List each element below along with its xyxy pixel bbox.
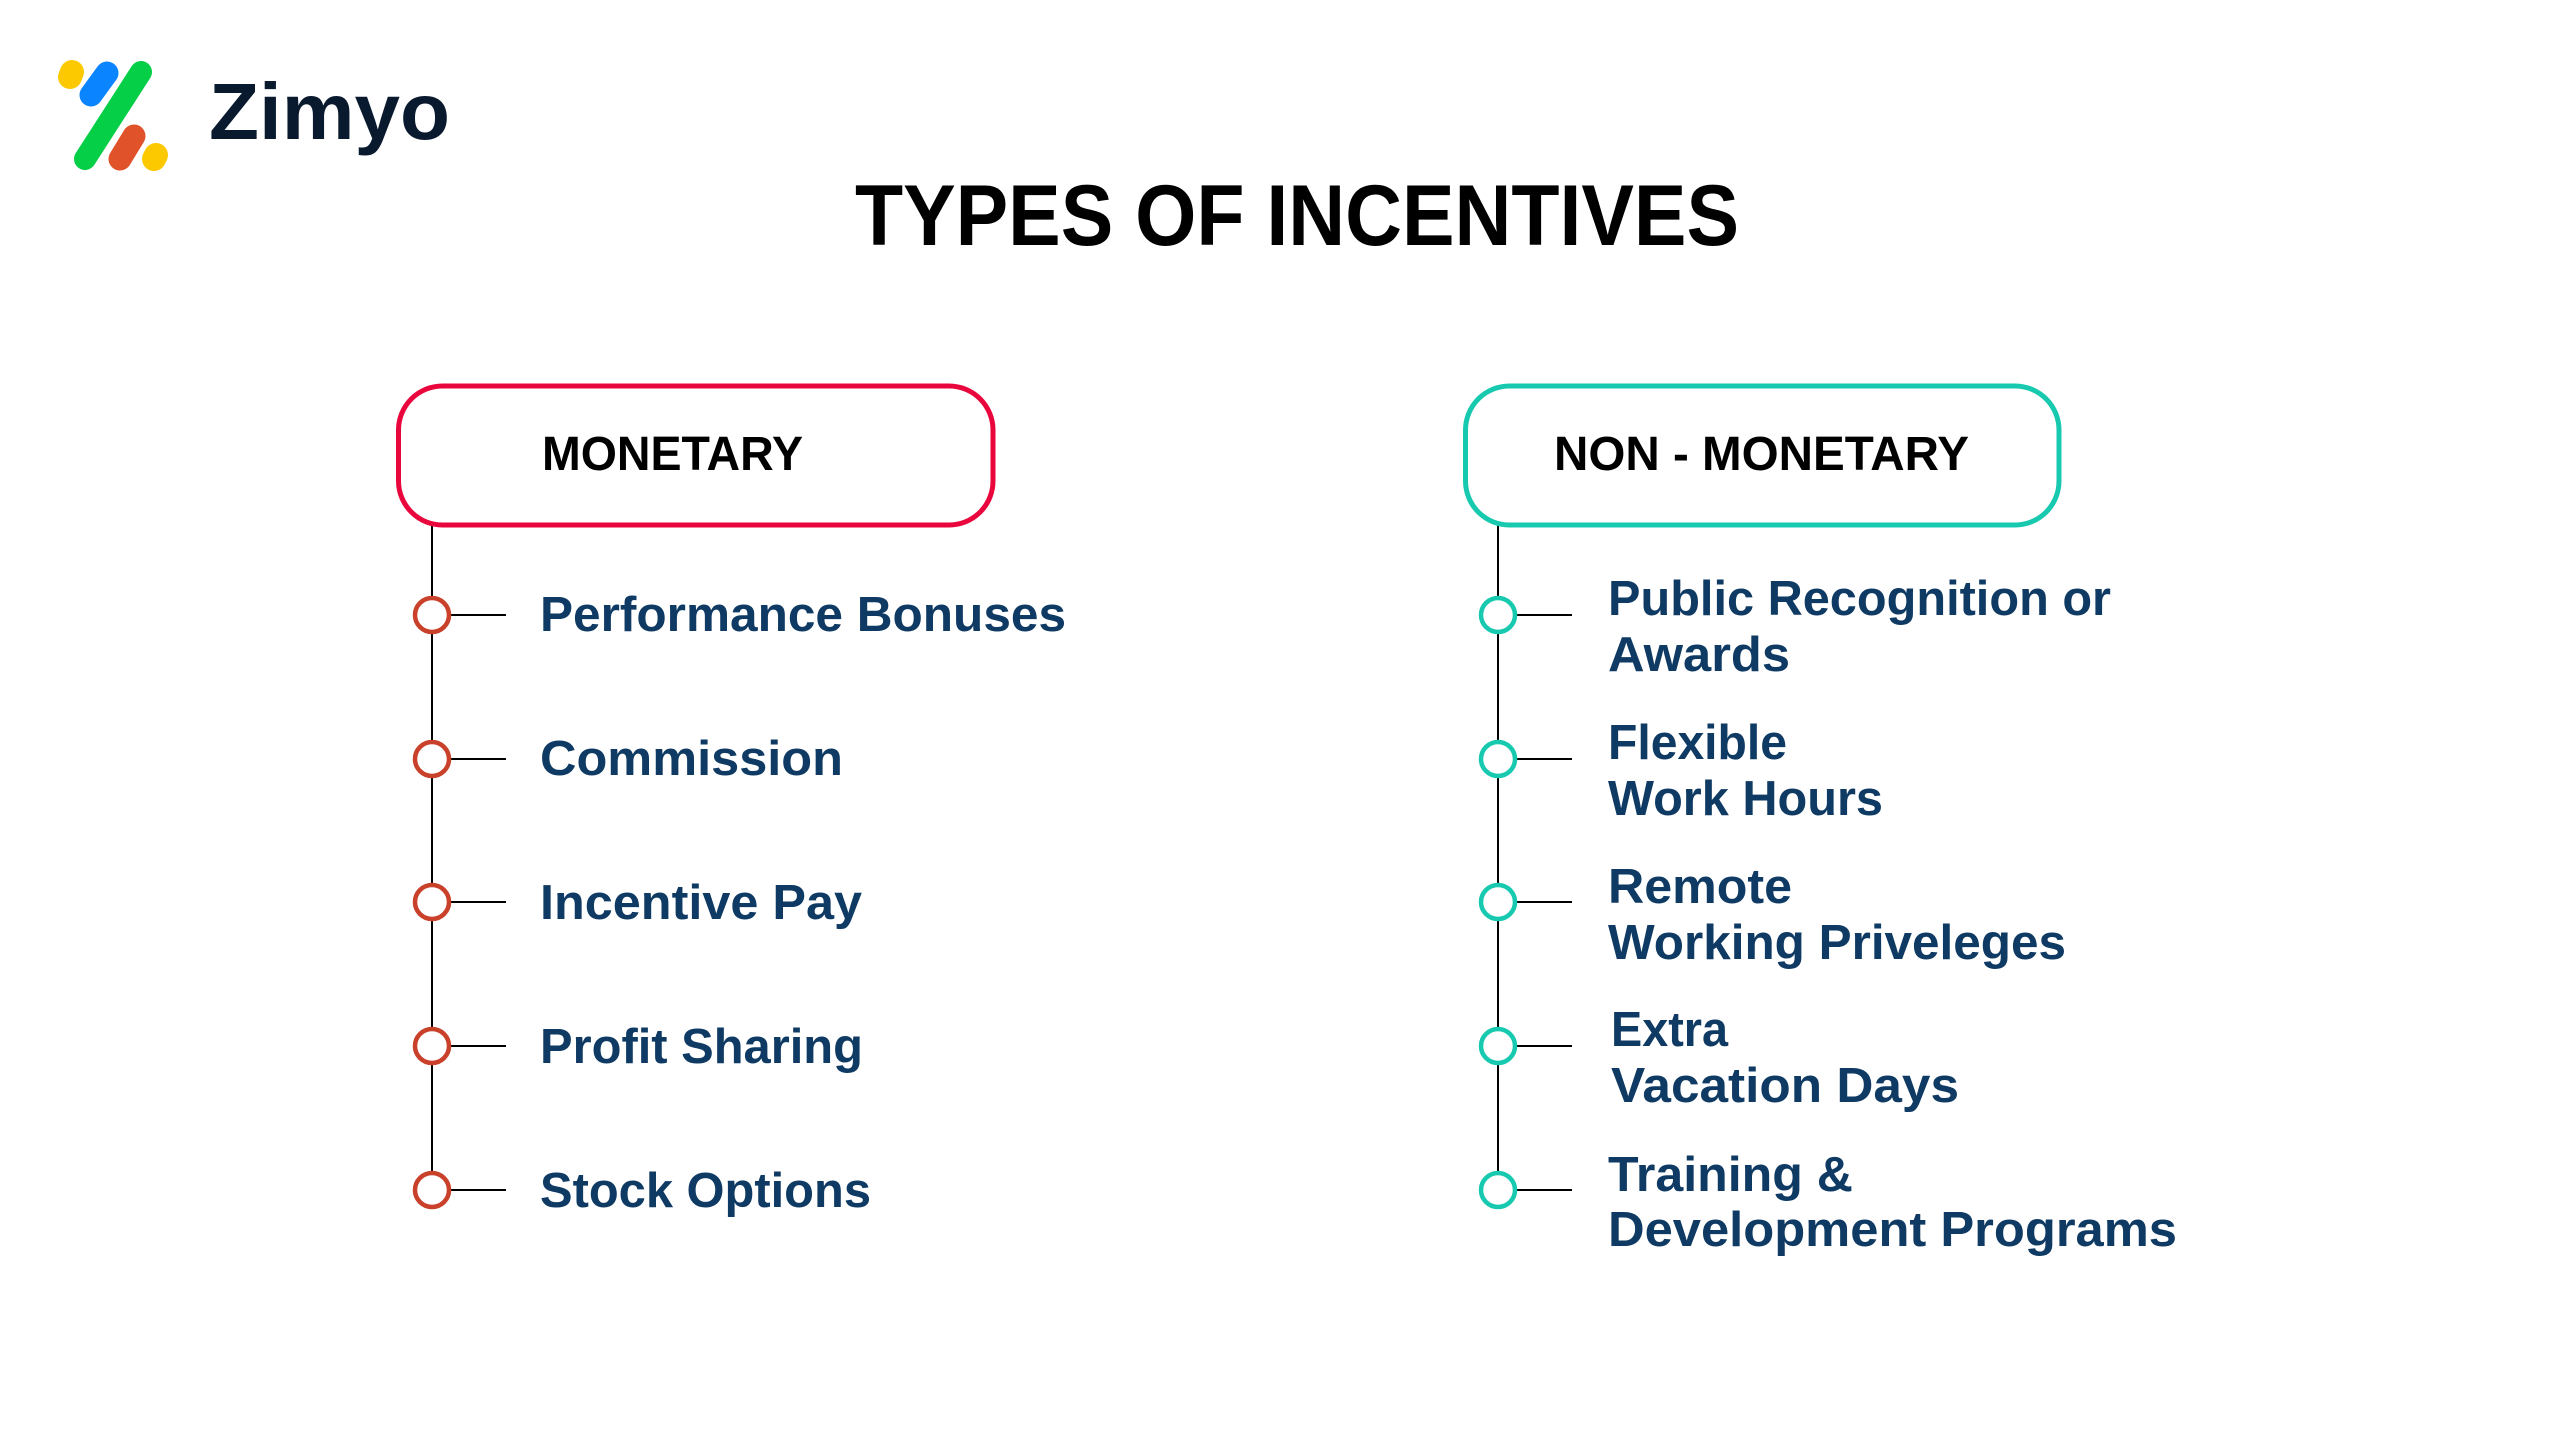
item: Incentive Pay: Incentive Pay bbox=[540, 876, 862, 930]
panel: monetary bbox=[398, 386, 1066, 1218]
item: Profit Sharing: Profit Sharing bbox=[540, 1020, 863, 1074]
item: Training & Development Programs: Training & bbox=[1608, 1148, 1853, 1202]
item: Training & Development Programs bbox=[1481, 1148, 2177, 1257]
heading box: monetary bbox=[398, 386, 993, 525]
connector: non-monetary spine bbox=[1497, 525, 1499, 1190]
item: Stock Options: Stock Options bbox=[540, 1164, 871, 1218]
item: Remote Working Priveleges: Remote bbox=[1608, 860, 1792, 914]
heading box: non-monetary: NON - MONETARY bbox=[1554, 428, 1969, 481]
item: Public Recognition or Awards: Awards bbox=[1608, 628, 1790, 682]
item: Flexible Work Hours: Work Hours bbox=[1608, 772, 1883, 826]
heading box: monetary: MONETARY bbox=[542, 428, 803, 481]
icon: Zimyo mark bbox=[70, 72, 156, 159]
item: Flexible Work Hours bbox=[1481, 716, 1883, 826]
item: Public Recognition or Awards bbox=[1481, 572, 2111, 682]
logo: Zimyo bbox=[70, 67, 450, 159]
item: Training & Development Programs: Development Programs bbox=[1608, 1203, 2177, 1257]
item: Extra Vacation Days bbox=[1481, 1003, 1959, 1113]
logo wordmark: Zimyo bbox=[209, 67, 450, 156]
item: Flexible Work Hours: Flexible bbox=[1608, 716, 1787, 770]
panel: non-monetary bbox=[1466, 386, 2177, 1257]
item: Extra Vacation Days: Vacation Days bbox=[1611, 1059, 1959, 1113]
item: Remote Working Priveleges bbox=[1481, 860, 2066, 970]
title: TYPES OF INCENTIVES bbox=[855, 168, 1739, 264]
item: Remote Working Priveleges: Working Priveleges bbox=[1608, 916, 2066, 970]
item: Commission: Commission bbox=[540, 732, 843, 786]
heading box: non-monetary bbox=[1466, 386, 2059, 525]
item: Performance Bonuses: Performance Bonuses bbox=[540, 588, 1066, 642]
item: Public Recognition or Awards: Public Recognition or bbox=[1608, 572, 2111, 626]
connector: monetary spine bbox=[431, 525, 433, 1190]
item: Commission bbox=[415, 732, 843, 786]
item: Extra Vacation Days: Extra bbox=[1611, 1003, 1729, 1057]
